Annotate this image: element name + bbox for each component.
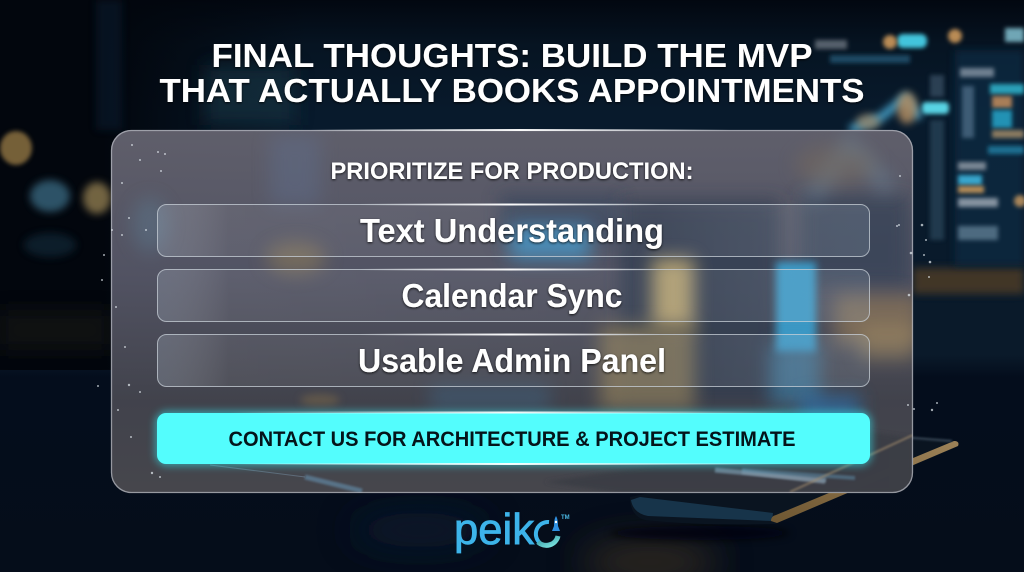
call to action button: CONTACT US FOR ARCHITECTURE & PROJECT ESTIMATE [228, 428, 796, 451]
call to action button [155, 411, 872, 466]
title [160, 37, 864, 109]
chart glow behind panel [850, 98, 920, 130]
dashboard right panel [955, 50, 1024, 265]
icon: logo ring with rocket: TM [561, 515, 570, 521]
glass panel [111, 129, 920, 493]
logo: peiko: peik [454, 505, 535, 554]
smartphone on desk [610, 437, 958, 540]
phone seen through glass [559, 436, 912, 492]
sparkles [97, 144, 938, 478]
row: usable admin panel: Usable Admin Panel [358, 342, 666, 379]
heading: prioritize for production: PRIORITIZE FOR PRODUCTION: [330, 158, 694, 185]
title: THAT ACTUALLY BOOKS APPOINTMENTS [160, 72, 864, 109]
dark patches [620, 200, 780, 400]
title: FINAL THOUGHTS: BUILD THE MVP [212, 37, 812, 74]
row: text understanding: Text Understanding [360, 212, 664, 249]
desk glow [580, 540, 720, 572]
row: text understanding [158, 204, 870, 256]
warm and blue glows [266, 242, 326, 274]
dashboard top bar [897, 34, 927, 48]
row: usable admin panel [158, 334, 870, 386]
logo: peiko [454, 505, 570, 554]
row: calendar sync: Calendar Sync [402, 277, 622, 314]
row: calendar sync [158, 268, 870, 322]
